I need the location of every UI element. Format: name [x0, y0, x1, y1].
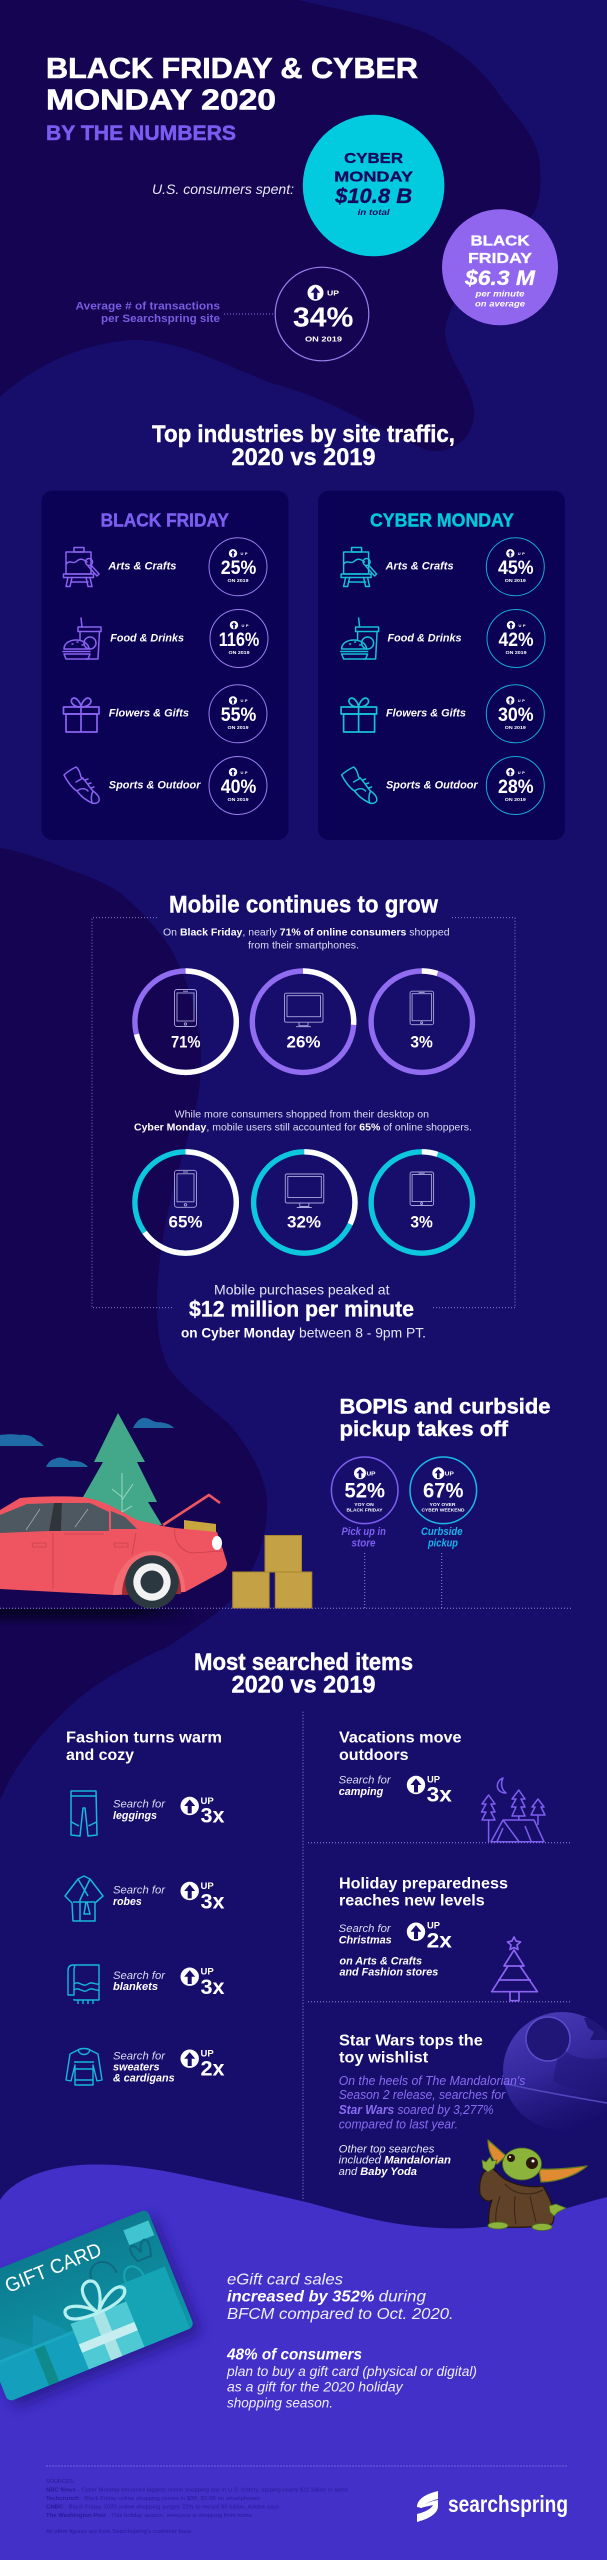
item: leggings: leggings — [113, 1810, 157, 1822]
stat ring: curbside pickup: Curbside — [421, 1526, 463, 1538]
bubble: Black Friday per minute: per minute — [474, 289, 525, 299]
callout: mobile purchases peak: $12 million per minute — [189, 1297, 414, 1322]
block: Star Wars tops the toy wishlist: Other top searches — [339, 2144, 435, 2156]
icon: camping — [482, 1778, 545, 1842]
stat ring: pick up in store: BLACK FRIDAY — [346, 1508, 382, 1513]
row: Food and Drinks: Food & Drinks — [110, 632, 184, 644]
row: Arts and Crafts — [64, 538, 267, 596]
panel: Black Friday industries — [41, 491, 288, 840]
title: BLACK FRIDAY & CYBER — [46, 53, 418, 85]
stat ring: curbside pickup: 67% — [423, 1479, 464, 1502]
donut: Black Friday smartphone 71%: 71% — [171, 1032, 200, 1051]
block: Star Wars tops the toy wishlist: On the heels of The Mandalorian's — [339, 2074, 525, 2088]
item: robes: 3x — [200, 1890, 225, 1913]
car windows — [0, 1503, 137, 1533]
item: robes — [65, 1876, 225, 1921]
item: sweaters and cardigans — [66, 2048, 225, 2085]
illustration: gift card — [0, 2209, 202, 2409]
item: leggings: UP — [200, 1796, 214, 1807]
donut: Black Friday tablet 3%: 3% — [410, 1032, 433, 1051]
sources: All other figures are from Searchspring's customer base. — [46, 2529, 193, 2535]
item: robes: Search for — [113, 1884, 166, 1896]
row: Flowers and Gifts: 30% — [498, 705, 534, 726]
logo: Searchspring — [417, 2491, 568, 2522]
row: Food and Drinks: 116% — [219, 630, 259, 651]
column: fashion — [65, 1729, 225, 2085]
text: U.S. consumers spent: U.S. consumers spent: — [152, 181, 294, 197]
row: Flowers and Gifts: 55% — [221, 705, 256, 726]
donut: Cyber Monday tablet 3%: 3% — [410, 1213, 433, 1232]
row: Arts and Crafts: 45% — [498, 558, 534, 579]
sources: Techcrunch - Black Friday online shopping comes in $9B, $3.6B on smartphones — [46, 2496, 260, 2502]
text: Black Friday mobile share — [163, 927, 450, 952]
bubble: Cyber Monday total: MONDAY — [334, 168, 413, 186]
heading: top industries: 2020 vs 2019 — [232, 444, 376, 471]
block: Star Wars tops the toy wishlist: toy wishlist — [339, 2050, 429, 2067]
row: Flowers and Gifts — [341, 685, 544, 743]
row: Sports and Outdoor: 28% — [498, 777, 534, 798]
stat ring: up 34% — [275, 267, 369, 361]
row: Sports and Outdoor: ON 2019 — [505, 797, 526, 802]
block: holiday preparedness: UP — [427, 1921, 441, 1932]
title: MONDAY 2020 — [46, 84, 276, 116]
stat ring: pick up in store: Pick up in — [341, 1526, 386, 1538]
block: holiday preparedness: Holiday preparedness — [339, 1875, 508, 1892]
illustration: Baby Yoda — [480, 2140, 587, 2230]
bubble: Cyber Monday total: in total — [358, 208, 391, 217]
row: Sports and Outdoor: ON 2019 — [228, 797, 249, 802]
donut: Cyber Monday desktop 32% — [254, 1152, 355, 1253]
yoda ears — [488, 2140, 506, 2164]
row: Arts and Crafts: UP — [518, 551, 525, 556]
block: vacations move outdoors: camping — [339, 1786, 384, 1798]
heading: Cyber Monday: CYBER MONDAY — [370, 511, 514, 531]
stat ring: pick up in store: 52% — [345, 1479, 385, 1502]
block: holiday preparedness: Search for — [339, 1923, 392, 1935]
text: 48% of consumers: as a gift for the 2020 holiday — [227, 2379, 404, 2395]
block: holiday preparedness: on Arts & Crafts — [340, 1955, 422, 1967]
row: Sports and Outdoor — [342, 756, 544, 814]
parcel in trunk — [184, 1520, 216, 1533]
text: Cyber Monday mobile share: Cyber Monday, mobile users still accounted for 65% of online shoppers. — [134, 1121, 472, 1133]
row: Arts and Crafts: ON 2019 — [228, 578, 249, 583]
row: Sports and Outdoor: Sports & Outdoor — [109, 779, 201, 791]
text: eGift card sales: BFCM compared to Oct. 2020. — [227, 2306, 454, 2323]
card label: GIFT CARD — [2, 2239, 105, 2298]
block: Star Wars tops the toy wishlist: Star Wars soared by 3,277% — [339, 2103, 494, 2117]
heading: mobile continues to grow: Mobile continues to grow — [169, 891, 439, 918]
row: Food and Drinks — [341, 610, 545, 668]
row: Sports and Outdoor: UP — [240, 770, 248, 775]
donut: Black Friday desktop 26%: 26% — [286, 1032, 320, 1051]
sources: NBC News - Cyber Monday becomes biggest online shopping day in U.S. history, topping nearly $11 billion in sales — [46, 2488, 348, 2494]
row: Food and Drinks: 42% — [498, 630, 534, 651]
heading: top industries: Top industries by site traffic, — [152, 421, 455, 448]
item: robes: UP — [200, 1881, 214, 1892]
callout: mobile purchases peak: between 8 - 9pm PT. — [299, 1325, 426, 1341]
row: Food and Drinks: ON 2019 — [228, 650, 250, 655]
heading: fashion turns warm: Fashion turns warm — [66, 1729, 222, 1746]
stat ring: curbside pickup: YOY OVER — [430, 1502, 456, 1507]
text: 48% of consumers: plan to buy a gift card (physical or digital) — [226, 2363, 477, 2379]
text: Cyber Monday mobile share: While more consumers shopped from their desktop on — [175, 1109, 429, 1121]
item: sweaters and cardigans: sweaters — [113, 2062, 160, 2074]
callout: mobile purchases peak — [181, 1281, 426, 1341]
block: holiday preparedness: reaches new levels — [339, 1893, 485, 1910]
row: Arts and Crafts: UP — [240, 551, 248, 556]
title: BY THE NUMBERS — [46, 122, 236, 145]
text: eGift card sales — [227, 2271, 454, 2323]
item: blankets: 3x — [200, 1976, 225, 1999]
block: vacations move outdoors: Search for — [339, 1774, 392, 1786]
text: 48% of consumers: 48% of consumers — [226, 2346, 362, 2363]
text: Black Friday mobile share: from their smartphones. — [248, 940, 359, 952]
donut: Cyber Monday desktop 32%: 32% — [287, 1213, 321, 1232]
trunk lid — [163, 1495, 220, 1525]
bubble: Black Friday per minute: BLACK — [470, 233, 530, 250]
callout: mobile purchases peak: on Cyber Monday — [181, 1325, 295, 1341]
stat ring: curbside pickup: UP — [445, 1472, 454, 1478]
block: Star Wars tops the toy wishlist: and Baby Yoda — [339, 2166, 417, 2178]
row: Sports and Outdoor: Sports & Outdoor — [386, 779, 478, 791]
yoda robe — [480, 2168, 554, 2227]
car body — [0, 1496, 227, 1595]
yoda hands and feet — [482, 2157, 497, 2172]
logo: Searchspring: searchspring — [448, 2491, 568, 2517]
bubble: Black Friday per minute: FRIDAY — [468, 250, 532, 267]
callout: mobile purchases peak: Mobile purchases peaked at — [214, 1281, 390, 1297]
bubble: Black Friday per minute: $6.3 M — [464, 267, 536, 290]
block: holiday preparedness — [339, 1875, 537, 2001]
donut: Black Friday smartphone 71% — [135, 971, 236, 1072]
block: vacations move outdoors: 3x — [427, 1784, 452, 1807]
row: Food and Drinks: UP — [518, 623, 526, 628]
title — [46, 53, 418, 145]
donut: Cyber Monday tablet 3% — [371, 1152, 473, 1253]
row: Flowers and Gifts: UP — [240, 698, 248, 703]
row: Sports and Outdoor: UP — [518, 770, 525, 775]
heading: BOPIS and curbside: BOPIS and curbside — [340, 1395, 550, 1418]
row: Flowers and Gifts: ON 2019 — [228, 725, 249, 730]
text: Black Friday mobile share: On Black Friday, nearly 71% of online consumers shopped — [163, 927, 450, 939]
heading: most searched items: 2020 vs 2019 — [232, 1671, 376, 1698]
background blob: middle — [0, 848, 267, 1800]
block: Star Wars tops the toy wishlist: Star Wars tops the — [339, 2032, 483, 2049]
block: vacations move outdoors: Vacations move — [339, 1729, 462, 1746]
block: vacations move outdoors: UP — [427, 1774, 441, 1785]
row: Food and Drinks: ON 2019 — [506, 650, 527, 655]
item: sweaters and cardigans: Search for — [113, 2050, 166, 2062]
row: Arts and Crafts — [341, 538, 544, 596]
stat ring: up 34%: 34% — [293, 302, 354, 333]
row: Arts and Crafts: 25% — [221, 558, 256, 579]
tail light — [212, 1536, 222, 1550]
row: Flowers and Gifts — [64, 685, 267, 743]
row: Flowers and Gifts: UP — [518, 698, 525, 703]
text: 48% of consumers — [226, 2346, 477, 2411]
sources: The Washington Post - This holiday season, everyone is shopping from home — [46, 2513, 252, 2519]
stat ring: curbside pickup: pickup — [427, 1538, 458, 1550]
block: vacations move outdoors: outdoors — [339, 1747, 409, 1764]
row: Flowers and Gifts: ON 2019 — [505, 725, 526, 730]
row: Arts and Crafts: Arts & Crafts — [107, 560, 176, 572]
row: Food and Drinks: UP — [242, 623, 249, 628]
text: eGift card sales: during — [379, 2289, 426, 2306]
bubble: Black Friday per minute — [442, 209, 558, 325]
heading: fashion turns warm: and cozy — [66, 1747, 134, 1764]
label: average transactions — [76, 300, 220, 325]
bubble: Cyber Monday total: $10.8 B — [334, 185, 412, 208]
row: Sports and Outdoor: 40% — [221, 777, 256, 798]
item: robes: robes — [113, 1896, 142, 1908]
clouds — [0, 1418, 174, 1467]
row: Food and Drinks: Food & Drinks — [388, 632, 462, 644]
item: sweaters and cardigans: 2x — [200, 2058, 225, 2081]
text: 48% of consumers: shopping season. — [227, 2395, 333, 2411]
block: Star Wars tops the toy wishlist — [339, 2032, 525, 2178]
item: blankets — [68, 1965, 225, 2004]
bubble: Black Friday per minute: on average — [475, 299, 525, 309]
heading: top industries — [152, 421, 455, 471]
block: vacations move outdoors — [339, 1729, 545, 1842]
sources: SOURCES: — [46, 2479, 75, 2485]
bottom purple section — [0, 2164, 607, 2560]
row: Arts and Crafts: Arts & Crafts — [385, 560, 454, 572]
bubble: Cyber Monday total: CYBER — [344, 150, 403, 167]
item: leggings — [71, 1791, 225, 1836]
stat ring: curbside pickup — [410, 1457, 477, 1550]
bubble: Cyber Monday total — [303, 115, 444, 256]
item: blankets: blankets — [113, 1981, 158, 1993]
sources: CNBC - Black Friday 2020 online shopping surges 22% to record $9 billion, Adobe says — [46, 2505, 279, 2511]
stat ring: pick up in store: UP — [366, 1472, 376, 1478]
row: Food and Drinks — [63, 610, 268, 668]
item: sweaters and cardigans: & cardigans — [113, 2073, 175, 2085]
block: Star Wars tops the toy wishlist: Season 2 release, searches for — [339, 2088, 506, 2102]
block: holiday preparedness: and Fashion stores — [340, 1967, 438, 1979]
heading: most searched items — [194, 1649, 413, 1698]
item: blankets: UP — [200, 1966, 214, 1977]
row: Sports and Outdoor — [64, 756, 267, 814]
item: blankets: Search for — [113, 1970, 166, 1982]
row: Flowers and Gifts: Flowers & Gifts — [386, 708, 466, 720]
row: Arts and Crafts: ON 2019 — [505, 578, 526, 583]
heading: fashion turns warm — [66, 1729, 222, 1764]
heading: BOPIS and curbside: pickup takes off — [340, 1418, 509, 1441]
stat ring: pick up in store — [331, 1457, 398, 1550]
heading: BOPIS and curbside — [340, 1395, 550, 1441]
item: sweaters and cardigans: UP — [200, 2049, 214, 2060]
text: Cyber Monday mobile share — [134, 1109, 472, 1133]
item: leggings: 3x — [200, 1805, 225, 1828]
block: holiday preparedness: 2x — [427, 1930, 452, 1953]
yoda head — [502, 2148, 542, 2180]
heading: Black Friday: BLACK FRIDAY — [101, 511, 229, 531]
tree — [83, 1413, 162, 1525]
row: Flowers and Gifts: Flowers & Gifts — [109, 708, 189, 720]
wheel — [113, 1551, 185, 1609]
item: leggings: Search for — [113, 1799, 166, 1811]
stat ring: curbside pickup: CYBER WEEKEND — [422, 1508, 465, 1513]
donut: Cyber Monday smartphone 65%: 65% — [168, 1213, 202, 1232]
illustration: death star — [503, 2012, 607, 2130]
background blob: top — [0, 0, 541, 451]
icon: christmas tree — [492, 1937, 537, 2001]
illustration: car, tree and boxes — [0, 1413, 312, 1626]
panel: Cyber Monday industries — [318, 491, 565, 840]
block: Star Wars tops the toy wishlist: included Mandalorian — [339, 2155, 451, 2167]
ground shadow — [0, 1609, 186, 1624]
label: average transactions: Average # of transactions — [76, 300, 220, 312]
stat ring: pick up in store: YOY ON — [354, 1502, 374, 1507]
text: eGift card sales: eGift card sales — [227, 2271, 343, 2288]
stat ring: pick up in store: store — [352, 1538, 376, 1550]
donut: Black Friday desktop 26% — [252, 971, 354, 1072]
label: average transactions: per Searchspring site — [101, 313, 220, 325]
sources — [46, 2479, 348, 2535]
donut: Black Friday tablet 3% — [371, 971, 472, 1072]
heading: most searched items: Most searched items — [194, 1649, 413, 1676]
text: eGift card sales: increased by 352% — [227, 2289, 374, 2306]
block: holiday preparedness: Christmas — [339, 1934, 392, 1946]
block: Star Wars tops the toy wishlist: compared to last year. — [339, 2117, 458, 2131]
donut: Cyber Monday smartphone 65% — [135, 1152, 236, 1253]
stacked boxes — [233, 1536, 312, 1608]
stat ring: up 34%: ON 2019 — [305, 337, 342, 344]
stat ring: up 34%: UP — [327, 288, 339, 297]
